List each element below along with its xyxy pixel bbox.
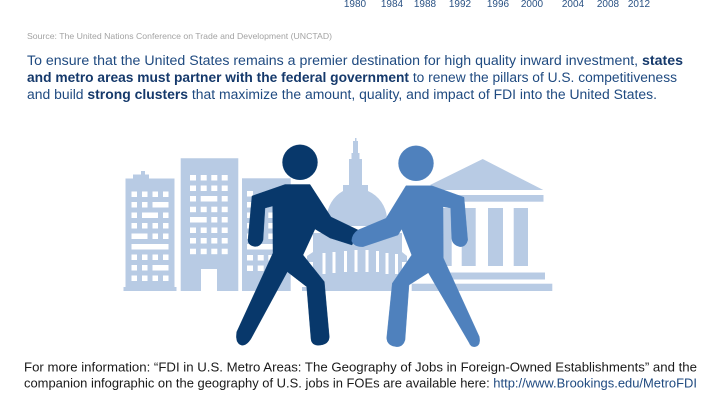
footer: more information text: companion infographic on the geography of U.S. jobs in FOEs are available here: http://www.Brookings.edu/MetroFDI [24,376,697,390]
icon: left office building [124,171,176,291]
icon: tall centre building [181,158,238,291]
footer: more information text: For more information: “FDI in U.S. Metro Areas: The Geography of Jobs in Foreign-Owned Establishments” and the [24,360,697,374]
icon: columned government building [412,159,552,291]
source note: Source: The United Nations Conference on Trade and Development (UNCTAD) [27,31,332,41]
policy statement text block: and build strong clusters that maximize the amount, quality, and impact of FDI into the United States. [27,87,657,102]
figure: dark blue person [236,145,358,345]
icon: capitol dome [302,138,408,291]
figure: mid blue person [352,146,480,347]
chart axis year labels [344,0,651,10]
icon: right office building [242,178,291,291]
policy statement text block: and metro areas must partner with the federal government to renew the pillars of U.S. competitiveness [27,70,677,85]
footer: more information text [24,360,697,390]
illustration: buildings and handshake [124,138,552,347]
policy statement text block: To ensure that the United States remains a premier destination for high quality inward investment, states [27,53,683,68]
policy statement text block [27,53,683,102]
